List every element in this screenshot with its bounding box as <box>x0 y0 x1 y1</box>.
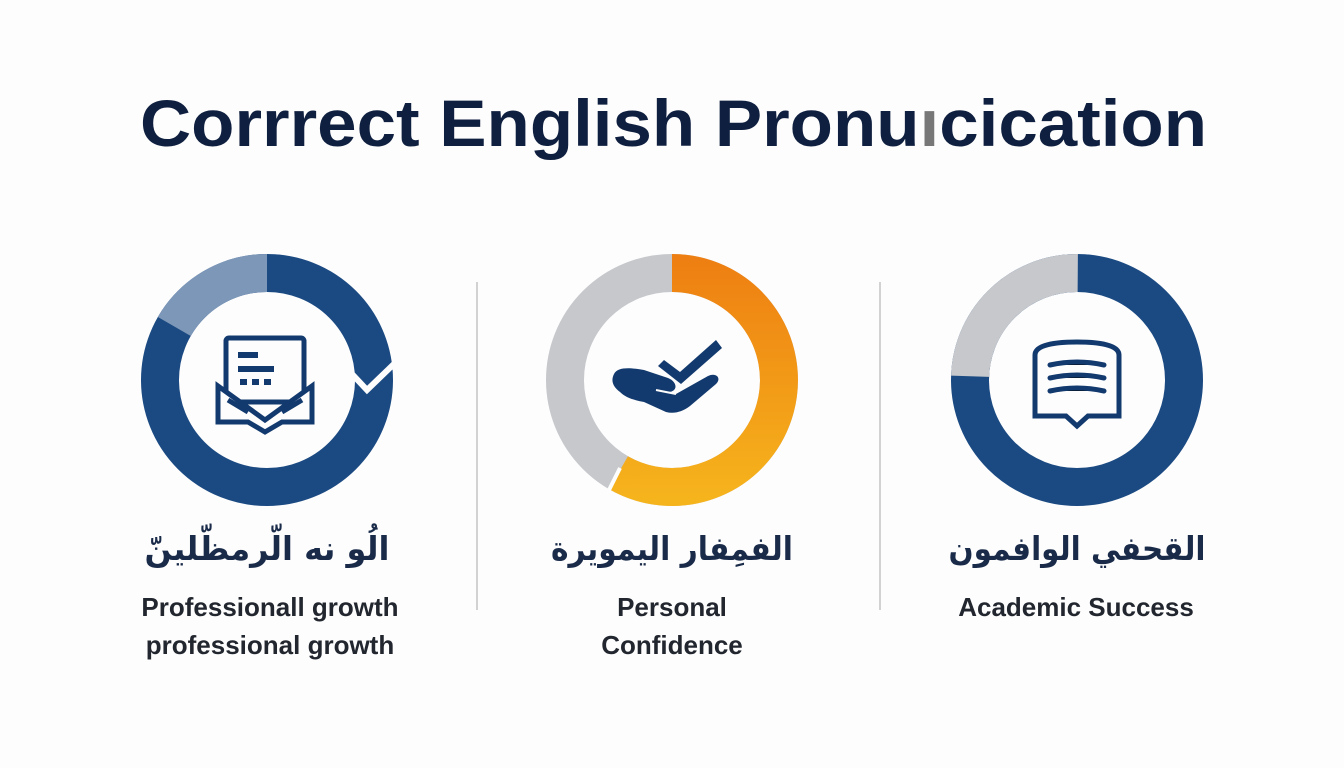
donut: personal confidence <box>565 273 779 492</box>
text: Confidence <box>601 630 743 660</box>
arabic label 2: الفمِفار اليمويرة <box>551 529 793 569</box>
english label 1: Professionall growth <box>141 592 399 622</box>
donut: academic success <box>966 269 1188 491</box>
english label 3: Academic Success <box>958 592 1194 622</box>
arabic label 1: الُو نه الّرمظّلينّ <box>144 524 390 569</box>
english label 2: Personal <box>617 592 727 622</box>
text: professional growth <box>146 630 394 660</box>
icon: book with document <box>218 338 312 432</box>
icon: open book <box>1035 342 1119 426</box>
title: Corrrect English Pronu ıcication <box>140 86 1207 160</box>
arabic label 3: القحفي الوافمون <box>948 529 1206 569</box>
icon: hand with check <box>612 340 722 413</box>
donut: professional growth <box>121 234 413 526</box>
